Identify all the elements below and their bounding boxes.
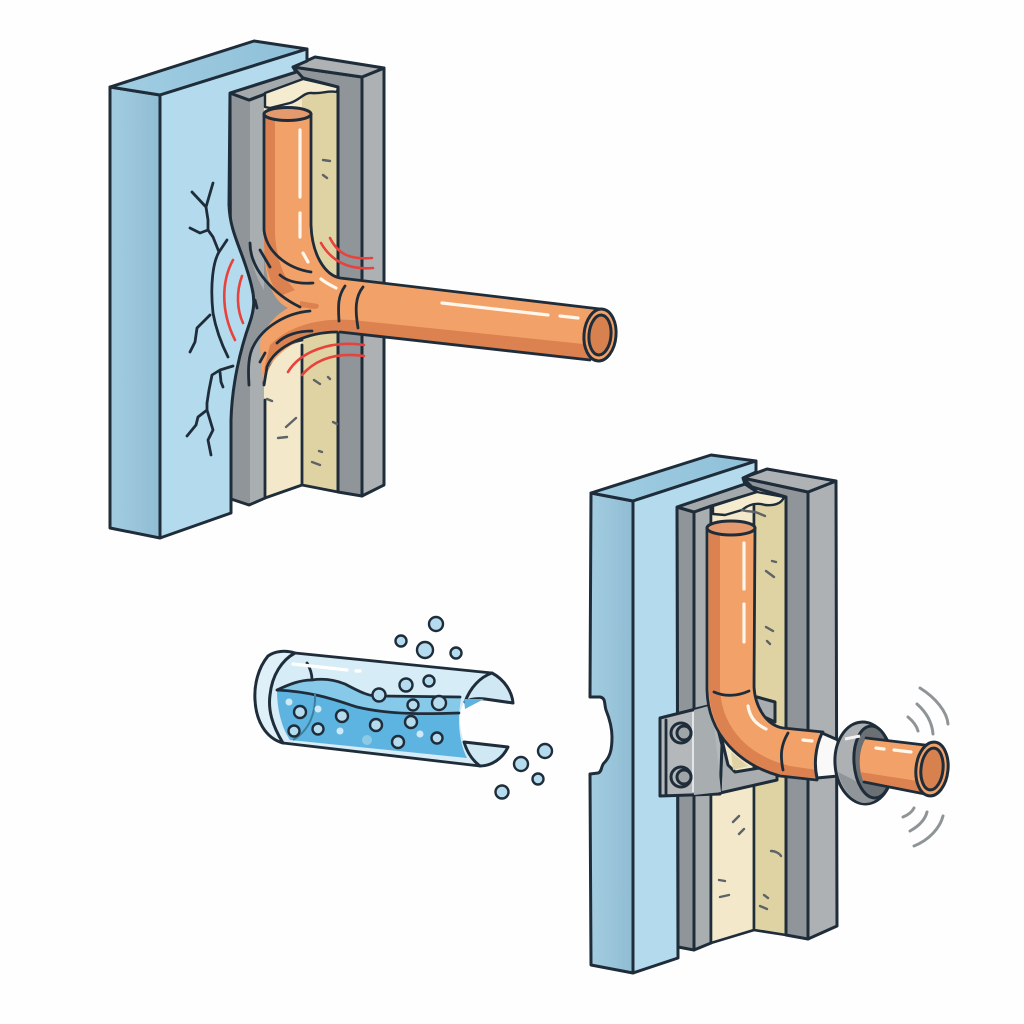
insulation divider lines [264, 332, 338, 498]
opening light band [462, 675, 490, 764]
tube lower ear [464, 742, 508, 766]
upper wall assembly with deformed pipe [110, 41, 618, 538]
flange ring [832, 720, 896, 806]
pipe body [707, 528, 823, 780]
insulation top torn edge [713, 492, 784, 515]
red stress arcs on wall [224, 260, 243, 340]
grey board inner strip [694, 506, 711, 950]
pipe open end [582, 308, 618, 362]
insulation light [711, 495, 754, 943]
tube blue wedge [464, 699, 484, 709]
right board top [293, 57, 384, 77]
grey board inner strip [249, 96, 264, 503]
tube top ear [465, 673, 513, 703]
inner faint arc [293, 693, 315, 740]
bracket lower flange [720, 740, 777, 793]
vibration waves top [908, 688, 948, 734]
right board dark strip and inner face [743, 478, 808, 939]
pipe highlights [744, 543, 812, 741]
insulation dark [754, 496, 786, 935]
insulation top torn edge [265, 79, 338, 108]
copper pipe body [260, 114, 601, 383]
pipe top opening [707, 521, 755, 535]
wall top face [591, 455, 756, 501]
floating bubbles right [496, 744, 552, 798]
insulation dark [302, 86, 338, 492]
right board light strip [808, 481, 837, 939]
lower wall assembly with bracket [590, 455, 951, 973]
water [277, 679, 467, 758]
pipe highlights [300, 130, 578, 318]
rim crescent [255, 651, 295, 743]
pipe outlines [250, 114, 600, 309]
right board top [743, 469, 836, 492]
pipe open end [913, 740, 951, 798]
grey board top [230, 70, 310, 100]
vibration waves bottom [903, 808, 943, 846]
bracket bolts [671, 723, 691, 787]
pipe top opening [264, 108, 311, 120]
wall front face [633, 461, 756, 973]
wall left face [110, 87, 160, 538]
wall cracks [190, 183, 228, 357]
floating bubbles above [396, 617, 462, 658]
wall front face [160, 49, 307, 538]
tube outline [277, 653, 492, 766]
insulation flecks [267, 160, 337, 465]
white sleeve [815, 733, 838, 778]
red stress arcs around pipe [288, 238, 373, 375]
water band [277, 679, 461, 714]
glass tube with water and bubbles [255, 617, 552, 798]
grey board left strip [677, 507, 694, 950]
bracket back flange [745, 697, 775, 722]
tube highlights [293, 664, 360, 671]
wall top face [110, 41, 307, 95]
pipe joint marks [714, 691, 788, 770]
right board dark strip and inner face [293, 67, 362, 496]
bracket plate [660, 705, 722, 796]
tube body [270, 653, 492, 766]
flecks [719, 561, 781, 909]
grey board left [230, 93, 330, 505]
wall left face with notch [590, 493, 633, 973]
pipe outer section [860, 738, 933, 795]
pipe shading [709, 531, 817, 778]
right board light strip [362, 68, 384, 496]
pipe dark shading [262, 116, 593, 378]
grey board top [677, 484, 757, 512]
insulation light [264, 80, 303, 499]
water bubbles in tube [286, 676, 446, 748]
